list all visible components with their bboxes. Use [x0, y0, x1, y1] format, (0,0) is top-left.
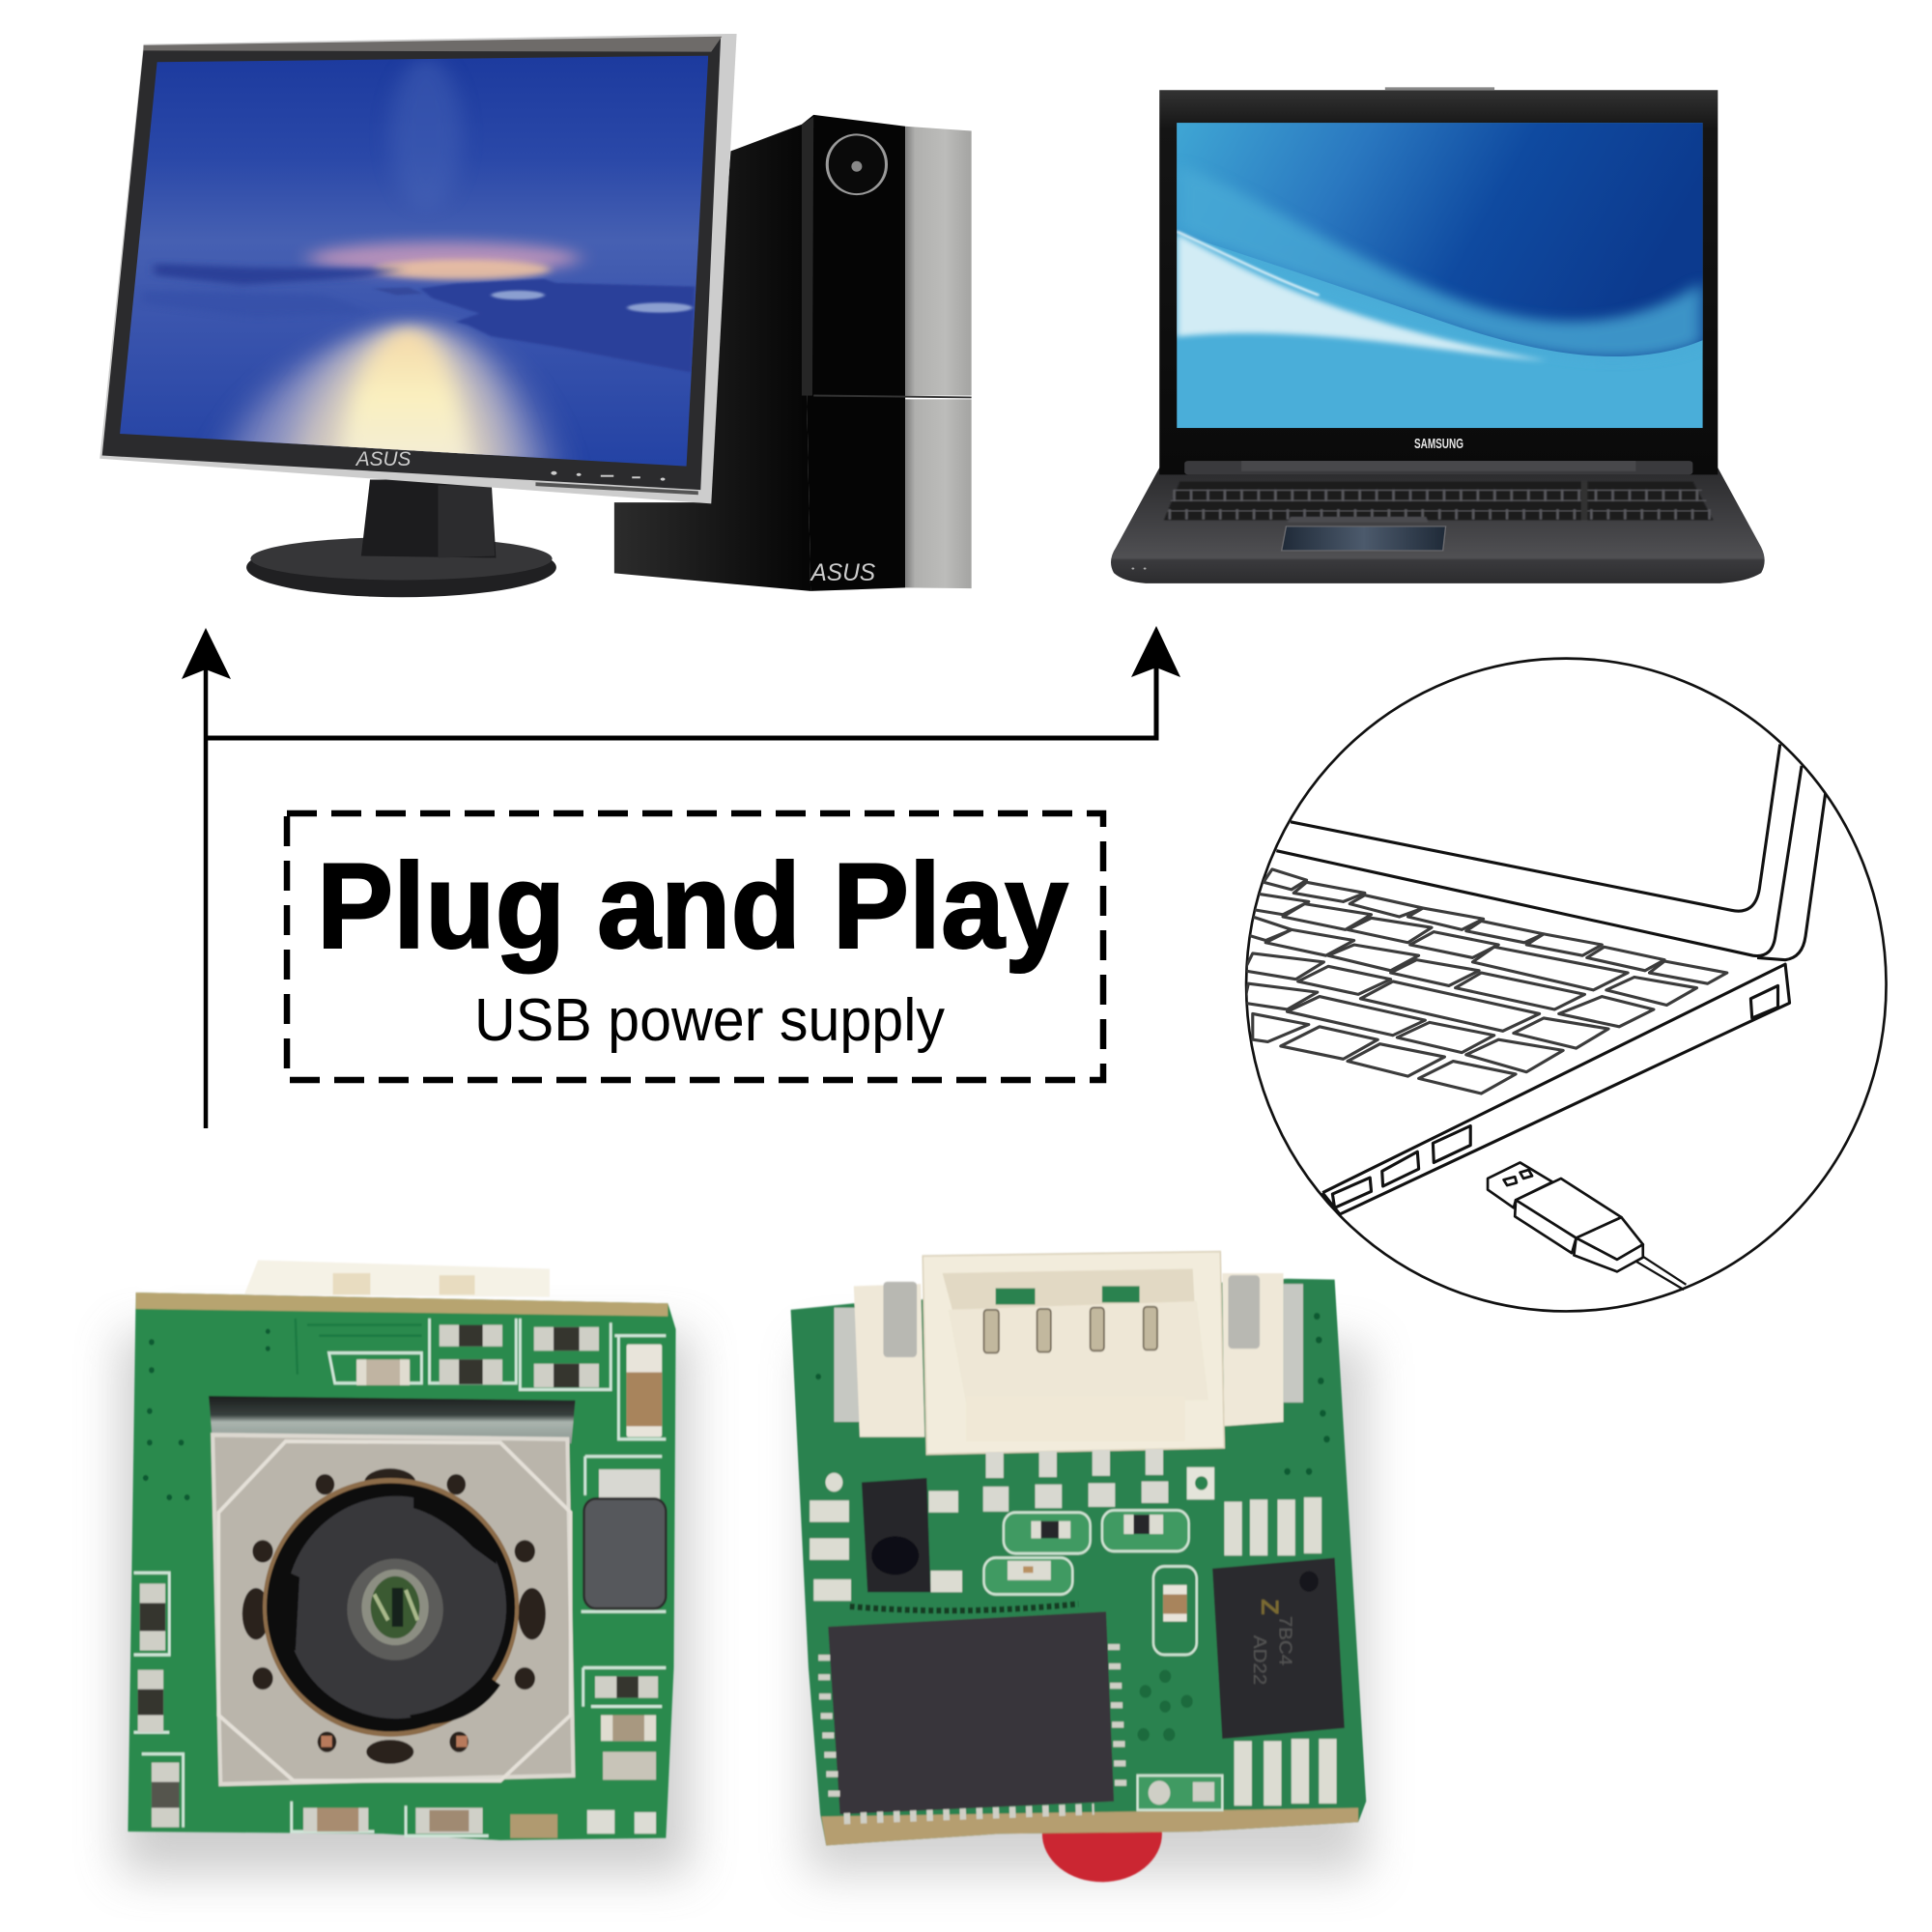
white blob: [126, 1260, 184, 1291]
connector pins: [983, 1307, 1157, 1353]
laptop base: [1111, 468, 1765, 583]
bottom pads: [1138, 1776, 1222, 1810]
capacitor top: [356, 1359, 410, 1385]
tower vent strip: [802, 117, 813, 395]
connector cavity: [943, 1268, 1195, 1310]
subheading: USB power supply: [474, 987, 945, 1054]
left vertical components: [138, 1583, 179, 1828]
tower silver panel: [905, 127, 972, 395]
mounting pad: [1187, 1467, 1214, 1499]
flash memory chip: AD22: [1249, 1635, 1269, 1685]
monitor stand: [246, 479, 556, 597]
keyboard keys: [1244, 869, 1727, 1094]
monitor brand: ASUS: [355, 448, 412, 470]
monitor silver frame: [99, 34, 737, 503]
lens center: [347, 1558, 443, 1661]
inset circle: [1246, 659, 1887, 1311]
board: [128, 1293, 676, 1840]
board shadow: [121, 1333, 691, 1874]
arrow: to desktop: [182, 628, 231, 1128]
inset: USB port line drawing: [1244, 659, 1887, 1311]
laptop hinge: [1184, 461, 1692, 474]
connector lower block: [949, 1301, 1208, 1441]
gold contacts: [321, 1736, 468, 1747]
board bottom edge: [821, 1807, 1358, 1845]
connector windows: [996, 1286, 1140, 1305]
connector housing: [923, 1252, 1224, 1454]
tower brand: ASUS: [809, 560, 876, 586]
laptop keyboard: [1164, 482, 1714, 523]
metal can: [213, 1435, 573, 1784]
vias: [815, 1313, 1330, 1475]
tower divider: [813, 395, 972, 397]
laptop lid: [1159, 90, 1718, 474]
resistors top: [440, 1325, 599, 1387]
bottom components: [303, 1807, 656, 1838]
solder pins: [983, 1449, 1168, 1512]
tower lower silver panel: [905, 399, 972, 588]
flash memory chip: Z: [1256, 1599, 1284, 1615]
traces and vias: [1138, 1670, 1193, 1741]
lens glue marks: [280, 1493, 500, 1724]
board: [791, 1279, 1366, 1845]
arrow: to laptop: [206, 626, 1180, 738]
inductor: [583, 1469, 666, 1608]
silver pads by connector: [834, 1284, 1303, 1422]
dashed box: [287, 813, 1103, 1080]
left IC: [810, 1473, 962, 1601]
lens bumps: [242, 1468, 546, 1764]
right capacitor: [627, 1345, 662, 1437]
vias: [143, 1329, 270, 1500]
red button: [1042, 1785, 1162, 1882]
photo: camera module front: [121, 1260, 691, 1874]
USB plug: [1488, 1162, 1686, 1290]
connector side tabs: [854, 1273, 1284, 1437]
flash memory chip: 7BC4: [1275, 1616, 1295, 1665]
photo: camera module back: [791, 1252, 1367, 1882]
lid webcam hump: [1385, 87, 1494, 90]
tower side panel: [614, 125, 810, 591]
can chamfers: [218, 1441, 571, 1780]
flash memory chip: [1212, 1497, 1345, 1805]
lens body: [286, 1496, 506, 1719]
monitor dark bezel: [102, 38, 721, 490]
laptop status lights: [1131, 567, 1147, 570]
laptop line art: [1276, 744, 1826, 1214]
laptop screen: [1177, 123, 1703, 428]
small components: [983, 1510, 1197, 1655]
white connector behind board: [244, 1261, 550, 1296]
sensor housing top: [209, 1396, 576, 1443]
metal cylinders: [883, 1275, 1260, 1357]
laptop touchpad: [1282, 526, 1446, 551]
heading: Plug and Play: [317, 839, 1068, 974]
laptop brand: SAMSUNG: [1414, 435, 1463, 451]
tower front black panel: [802, 115, 905, 591]
monitor screen: [113, 54, 716, 470]
board edge: [136, 1293, 668, 1317]
traces: [134, 1319, 666, 1835]
board shadow: [807, 1343, 1367, 1874]
right lower components: [595, 1676, 658, 1779]
illustration: Samsung laptop: [1111, 87, 1765, 583]
monitor top bezel highlight: [144, 37, 722, 52]
illustration: desktop monitor and tower: [99, 34, 972, 597]
lens ring: [263, 1478, 519, 1737]
main QFN chip: [818, 1611, 1126, 1819]
tower power ring: [827, 134, 886, 194]
monitor button ridge: [535, 482, 698, 495]
monitor buttons: [551, 471, 666, 481]
solder residue: [850, 1604, 1078, 1610]
callout: plug and play: [287, 813, 1103, 1080]
